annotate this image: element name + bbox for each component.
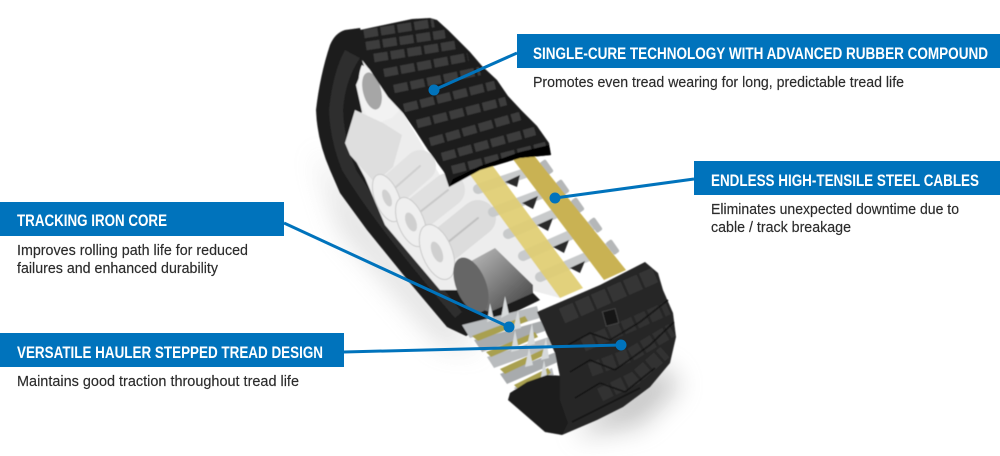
iron core bars — [462, 306, 558, 394]
leader: tread design — [344, 340, 626, 352]
leader lines — [284, 53, 694, 352]
yellow cable band right — [512, 153, 626, 280]
leader: rubber compound — [428, 53, 517, 96]
upper tread base — [360, 18, 551, 187]
tread cut edge — [449, 145, 551, 187]
steel links — [478, 167, 610, 277]
white undercarriage frame — [350, 60, 560, 298]
leader: steel cables — [550, 179, 694, 204]
iron core spikes — [487, 296, 549, 382]
lower frame casting — [345, 110, 402, 183]
drive hub bracket — [358, 65, 402, 124]
front tread grooves — [568, 300, 674, 422]
callout: steel cables: Eliminates unexpected downtime due to — [711, 202, 959, 218]
roller flanges — [396, 166, 478, 243]
front tread block — [537, 262, 676, 435]
front tread window — [602, 308, 619, 326]
callout: stepped tread design — [0, 333, 344, 390]
callout: steel cables: cable / track breakage — [711, 220, 851, 236]
side nubs — [540, 159, 620, 255]
callout: single-cure technology: Promotes even tread wearing for long, predictable tread life — [533, 75, 904, 91]
far side rubber belt — [316, 28, 540, 336]
callout: single-cure technology — [517, 34, 1000, 91]
leader: iron core — [284, 223, 514, 332]
callout: stepped tread design: VERSATILE HAULER STEPPED TREAD DESIGN — [17, 343, 323, 362]
callout: tracking iron core: failures and enhanced durability — [17, 261, 219, 277]
link shadows — [505, 175, 585, 273]
illustration: cutaway rubber track — [316, 18, 676, 435]
road wheels — [367, 170, 462, 285]
front tread inner hollow — [508, 375, 575, 435]
front tread lower lugs — [583, 308, 672, 395]
callout: tracking iron core — [0, 202, 284, 277]
callout: steel cables — [694, 161, 1000, 236]
fading rear roller — [446, 248, 533, 318]
callout: stepped tread design: Maintains good traction throughout tread life — [17, 374, 299, 390]
callout: tracking iron core: Improves rolling path life for reduced — [17, 243, 248, 259]
belt side highlight — [329, 50, 462, 318]
yellow cable stubs — [472, 316, 551, 391]
callout: tracking iron core: TRACKING IRON CORE — [17, 211, 167, 230]
yellow cable band left — [468, 165, 583, 298]
ground shadows — [315, 150, 680, 436]
front tread top lugs — [562, 275, 655, 316]
upper tread lugs — [364, 23, 546, 170]
